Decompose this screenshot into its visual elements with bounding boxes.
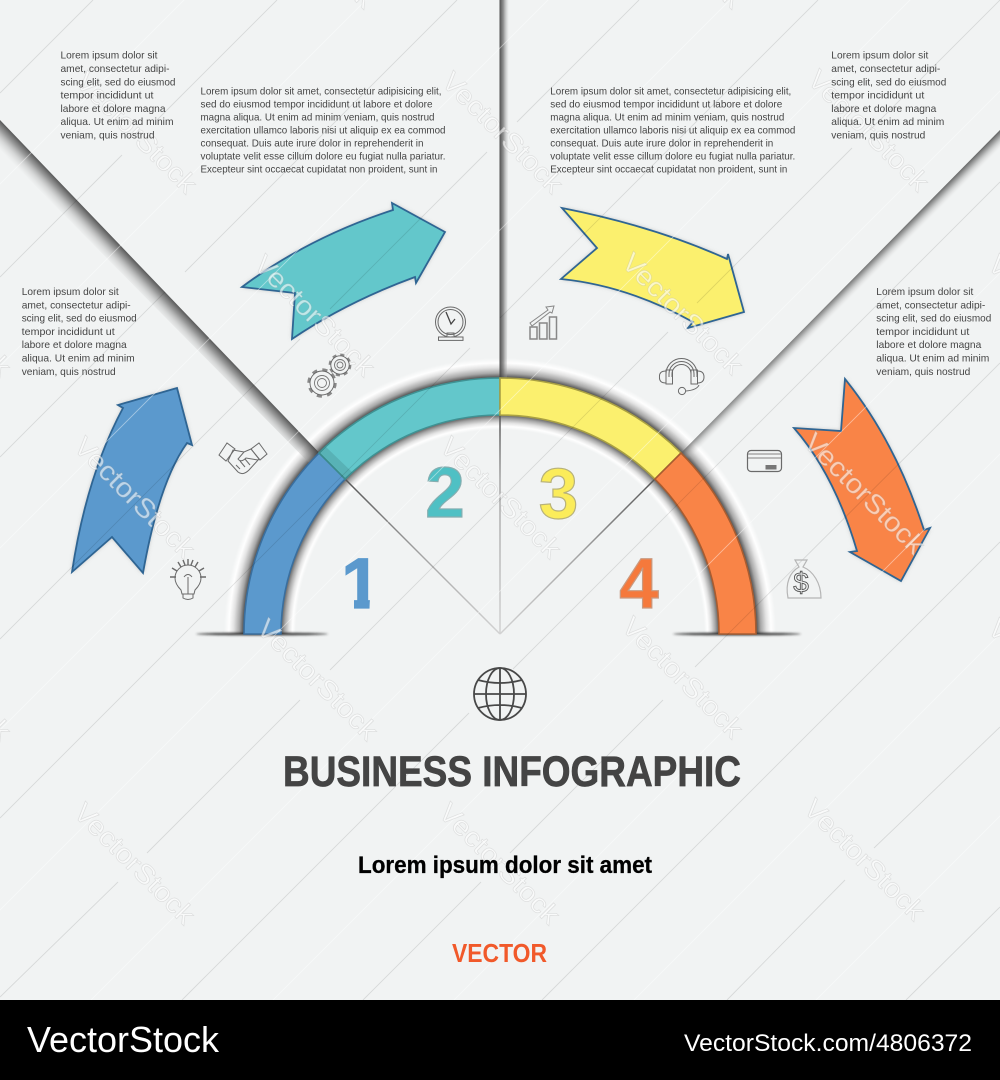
arrow 4 orange [794, 379, 930, 581]
watermarks: VectorStock [251, 613, 384, 746]
text block: top left: veniam, quis nostrud [60, 130, 155, 142]
vector label: VECTOR [452, 938, 547, 968]
icon: lightbulb [170, 559, 206, 600]
text block: centre right: exercitation ullamco laboris nisi ut aliquip ex ea commod [550, 125, 796, 136]
ring joint shade [319, 447, 352, 479]
text block: centre right: consequat. Duis aute irure dolor in reprehenderit in [550, 138, 774, 149]
text block: centre left: consequat. Duis aute irure dolor in reprehenderit in [200, 138, 424, 149]
icon: credit card [748, 450, 782, 472]
text block: right: veniam, quis nostrud [876, 367, 971, 378]
text block: centre left: Lorem ipsum dolor sit amet, consectetur adipisicing elit, [200, 86, 442, 97]
segment divider shadows [0, 0, 1000, 474]
text block: centre left: voluptate velit esse cillum dolore eu fugiat nulla pariatur. [200, 151, 446, 162]
text block: top left: labore et dolore magna [60, 104, 166, 115]
text block: right: aliqua. Ut enim ad minim [876, 354, 989, 364]
divider: left [0, 120, 330, 474]
text block: centre right: Lorem ipsum dolor sit amet, consectetur adipisicing elit, [550, 86, 791, 97]
text block: centre left: Excepteur sint occaecat cupidatat non proident, sunt in [200, 164, 438, 175]
icon: gears [309, 355, 350, 396]
large gear [309, 370, 335, 396]
text block: left: veniam, quis nostrud [22, 367, 116, 378]
number 2: 2 [425, 454, 465, 533]
segment numbers [346, 466, 659, 609]
subtitle: Lorem ipsum dolor sit amet [358, 852, 652, 879]
icon: clock [436, 307, 466, 340]
text block: top left [60, 51, 176, 142]
text block: centre right: voluptate velit esse cillum dolore eu fugiat nulla pariatur. [550, 151, 795, 162]
footer bar [0, 1000, 1000, 1080]
text block: centre right: magna aliqua. Ut enim ad minim veniam, quis nostrud [550, 112, 785, 123]
text block: left: labore et dolore magna [22, 340, 127, 351]
ring halo shadow [227, 361, 773, 634]
text block: right: labore et dolore magna [876, 340, 982, 351]
divider: centre [500, 0, 509, 385]
icon: headset [659, 358, 704, 395]
watermarks: VectorStock [616, 247, 749, 380]
text block: centre right: sed do eiusmod tempor incididunt ut labore et dolore [550, 99, 783, 110]
text block: top left: scing elit, sed do eiusmod [60, 77, 176, 88]
watermarks: VectorStock [616, 611, 749, 744]
text block: left: scing elit, sed do eiusmod [22, 314, 137, 325]
text block: centre left: magna aliqua. Ut enim ad minim veniam, quis nostrud [200, 112, 435, 123]
ring segment 1 blue [244, 453, 345, 634]
text block: left [22, 287, 137, 378]
arrow 3 yellow [561, 208, 744, 328]
icon: growth chart [530, 306, 556, 339]
text block: right: tempor incididunt ut [876, 327, 969, 338]
watermarks: VectorStock [433, 797, 566, 930]
watermarks: VectorStock [70, 66, 203, 199]
text block: top left: Lorem ipsum dolor sit [60, 51, 158, 62]
text block: right: amet, consectetur adipi- [876, 300, 985, 311]
text block: top right: veniam, quis nostrud [831, 130, 926, 142]
text block: top right: aliqua. Ut enim ad minim [831, 117, 944, 128]
watermarks: VectorStock [798, 427, 931, 560]
text block: left: Lorem ipsum dolor sit [22, 287, 119, 298]
number 4: 4 [619, 545, 659, 624]
footer brand: VectorStock [27, 1019, 220, 1060]
arrow 2 teal [242, 203, 445, 339]
watermarks: VectorStock [436, 66, 569, 199]
watermarks: VectorStock [434, 431, 567, 564]
text block: right [876, 287, 992, 378]
divider: right [675, 130, 1000, 467]
text block: left: aliqua. Ut enim ad minim [22, 354, 135, 364]
text block: top left: aliqua. Ut enim ad minim [60, 117, 174, 128]
watermarks: VectorStock [68, 797, 201, 930]
title: BUSINESS INFOGRAPHIC [283, 748, 741, 796]
text block: top left: amet, consectetur adipi- [60, 64, 170, 75]
ring segment 3 yellow [500, 378, 681, 479]
text block: top right [831, 51, 947, 142]
text block: top right: Lorem ipsum dolor sit [831, 51, 928, 62]
text block: centre left: exercitation ullamco laboris nisi ut aliquip ex ea commod [200, 125, 446, 136]
text block: centre left: sed do eiusmod tempor incididunt ut labore et dolore [200, 99, 433, 110]
text block: top right: amet, consectetur adipi- [831, 64, 940, 75]
number 3: 3 [539, 455, 578, 534]
watermarks: VectorStock [68, 431, 201, 564]
number 1: 1 [341, 545, 381, 624]
text block: centre right: Excepteur sint occaecat cupidatat non proident, sunt in [550, 164, 788, 175]
ring segment 2 teal [319, 378, 500, 479]
icon: money bag [787, 560, 821, 598]
icon: globe [474, 668, 526, 720]
semicircle ring [244, 378, 756, 634]
text block: right: scing elit, sed do eiusmod [876, 314, 992, 325]
footer url: VectorStock.com/4806372 [684, 1030, 972, 1057]
arrow 1 blue [72, 388, 192, 573]
text block: top right: labore et dolore magna [831, 104, 937, 115]
inner divider lines [345, 415, 655, 634]
ring segment 4 orange [655, 453, 756, 634]
watermarks: VectorStock [798, 793, 931, 926]
text block: left: tempor incididunt ut [22, 327, 115, 338]
icon: handshake [219, 443, 267, 474]
small gear [330, 355, 350, 375]
text block: left: amet, consectetur adipi- [22, 300, 131, 311]
text block: centre left [200, 86, 446, 175]
text block: centre right [550, 86, 796, 175]
text block: top right: scing elit, sed do eiusmod [831, 77, 947, 88]
icon: money bag: $ [793, 567, 809, 598]
text block: top right: tempor incididunt ut [831, 91, 924, 102]
floor shadows under the ring [196, 633, 801, 635]
watermarks: VectorStock [248, 249, 381, 382]
watermarks: VectorStock [802, 64, 935, 197]
text block: right: Lorem ipsum dolor sit [876, 287, 973, 298]
text block: top left: tempor incididunt ut [60, 91, 154, 102]
